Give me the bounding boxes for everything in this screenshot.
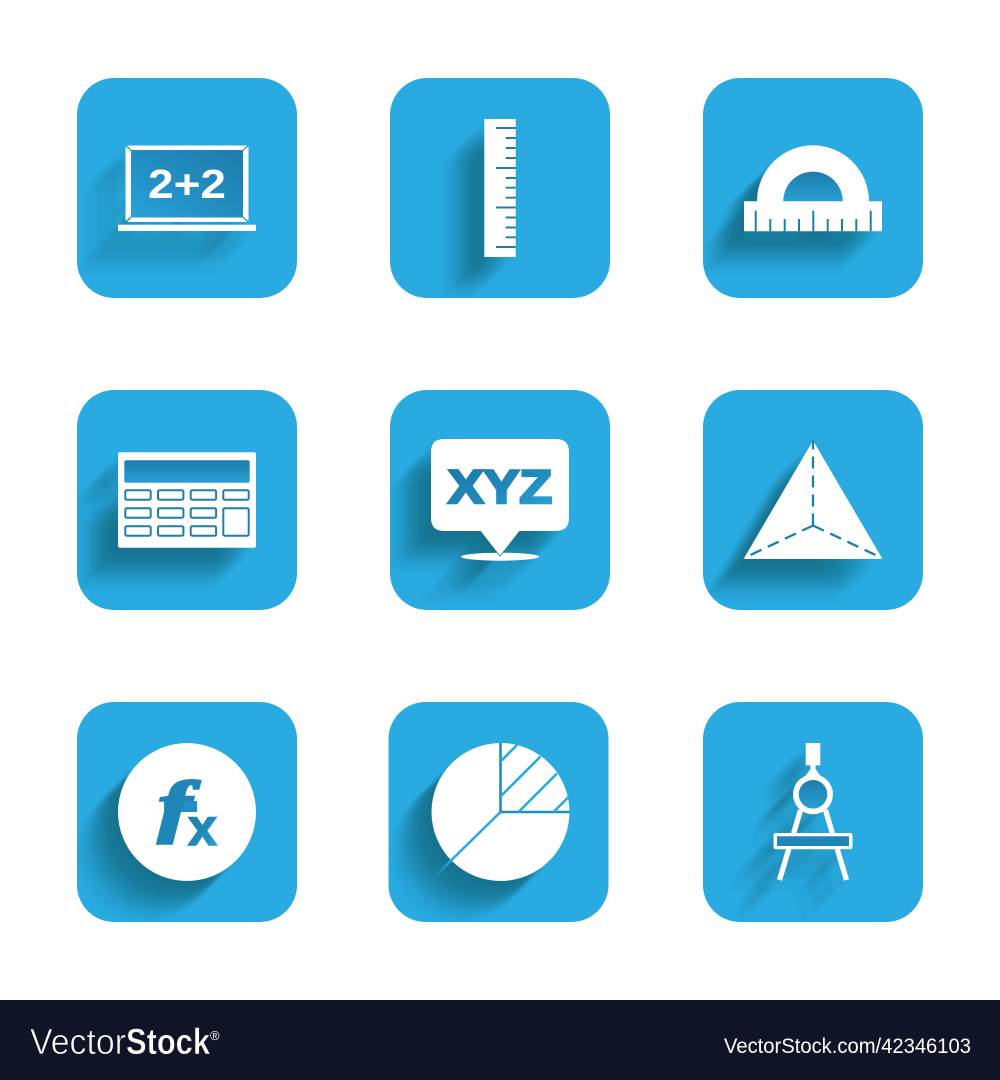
footer logo: Vector xyxy=(30,1021,126,1062)
icon: protractor xyxy=(744,145,882,231)
tile background xyxy=(77,390,297,610)
icon: drawing compass xyxy=(774,743,852,880)
calculator shadow xyxy=(118,452,256,548)
panel: tetrahedron xyxy=(703,390,923,610)
icon: chalkboard: 2+2 xyxy=(148,161,226,207)
fx label: x xyxy=(188,799,217,857)
tile background xyxy=(703,390,923,610)
fx label xyxy=(158,767,217,857)
footer image id: VectorStock.com/42346103 xyxy=(724,1035,971,1058)
ruler ticks xyxy=(496,128,516,247)
XYZ label: XYZ xyxy=(448,460,552,513)
panel: drawing compass xyxy=(703,702,923,922)
tile background xyxy=(77,78,297,298)
tile background xyxy=(77,702,297,922)
icon: pie disc xyxy=(432,743,570,881)
panel: calculator xyxy=(77,390,297,610)
footer logo xyxy=(30,1021,220,1062)
circle shadow xyxy=(118,743,256,881)
panel: protractor xyxy=(703,78,923,298)
icon: circle xyxy=(118,743,256,881)
footer logo: ® xyxy=(210,1028,220,1043)
icon: ruler xyxy=(484,119,516,257)
tile background xyxy=(388,702,608,922)
icon: tetrahedron xyxy=(744,440,882,559)
footer bar xyxy=(0,1000,1000,1080)
tetrahedron shadow xyxy=(744,440,882,559)
pie shadow xyxy=(432,743,570,881)
icon: chalkboard xyxy=(118,146,256,231)
bubble shadow xyxy=(431,439,569,561)
chalkboard shadow xyxy=(118,146,256,231)
calculator display xyxy=(124,460,250,483)
fx label: f xyxy=(158,767,200,844)
protractor ticks xyxy=(756,211,871,231)
panel: function xyxy=(77,702,297,922)
protractor window xyxy=(783,172,843,202)
panel: XYZ speech bubble xyxy=(390,390,610,610)
dashed edges xyxy=(744,440,882,558)
tile background xyxy=(390,390,610,610)
panel: ruler xyxy=(390,78,610,298)
icon: calculator body xyxy=(118,452,256,548)
calculator buttons xyxy=(125,490,249,536)
board surface xyxy=(130,149,244,218)
tile background xyxy=(390,78,610,298)
compass ring and bar recesses xyxy=(777,779,849,846)
protractor shadow xyxy=(744,145,882,231)
tile background xyxy=(703,78,923,298)
pointer tip edge xyxy=(495,550,505,556)
panel: chalkboard xyxy=(77,78,297,298)
ruler shadow xyxy=(484,119,516,257)
tile background xyxy=(703,702,923,922)
footer logo: Stock xyxy=(126,1021,211,1062)
compass shadow xyxy=(774,743,852,880)
pie dividers xyxy=(432,743,570,879)
panel: pie chart xyxy=(388,702,608,922)
icon: speech bubble xyxy=(431,439,569,561)
